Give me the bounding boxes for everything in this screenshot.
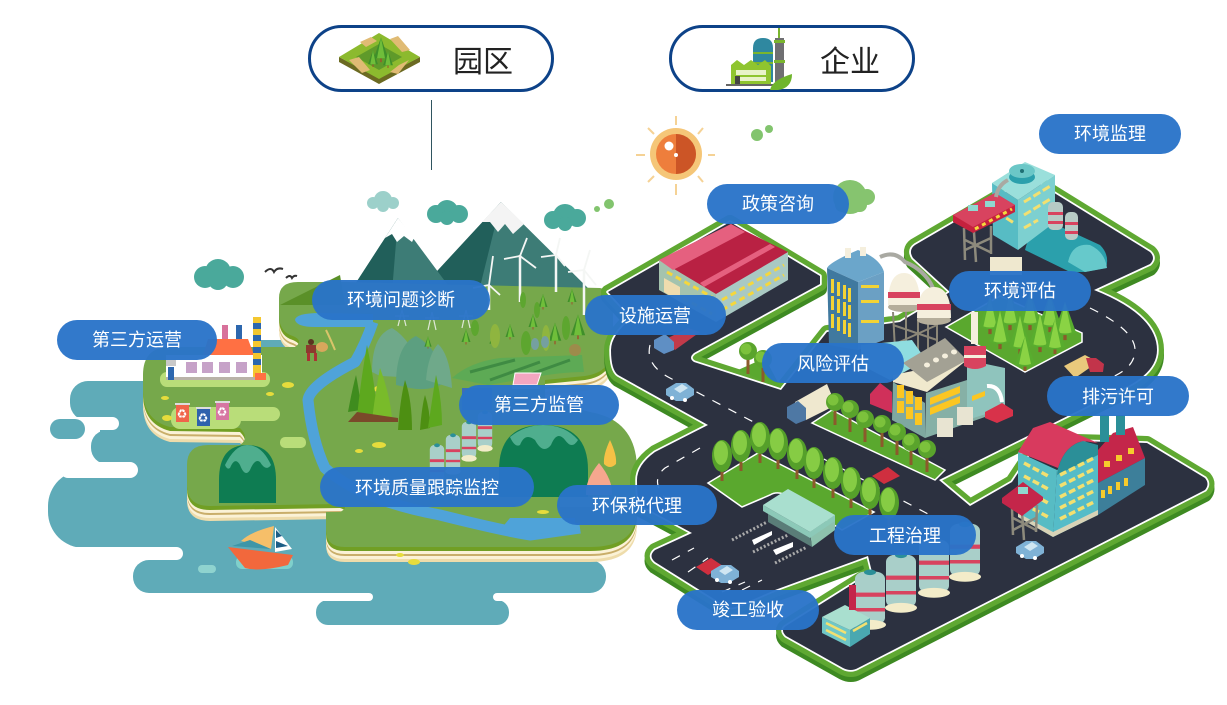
small teal plant: [822, 585, 870, 647]
icon: green factory: [726, 28, 792, 90]
solar panels: [462, 373, 541, 410]
pill: 环保税代理: [557, 485, 717, 525]
truck on road: [654, 328, 700, 354]
header pill: 企业: [670, 26, 914, 90]
pill: 第三方运营: [57, 320, 217, 360]
central factory: [861, 312, 1013, 438]
delivery truck: [787, 384, 832, 424]
small dark hill: [280, 275, 345, 305]
pill: 环境问题诊断: 环境问题诊断: [347, 290, 455, 310]
pill: 环境质量跟踪监控: [320, 467, 534, 507]
pill: 环境质量跟踪监控: 环境质量跟踪监控: [355, 478, 499, 498]
pill: 环境问题诊断: [312, 280, 490, 320]
coloured trees: [586, 440, 616, 495]
pill: 排污许可: [1047, 376, 1189, 416]
label: 园区: 园区: [453, 46, 513, 79]
pickup truck: [1064, 355, 1104, 378]
pill: 环境监理: 环境监理: [1074, 124, 1146, 144]
pylons: [395, 310, 473, 330]
tiny flowers: [161, 382, 549, 565]
sailboat: [228, 526, 293, 569]
water tanks: [429, 410, 493, 485]
pill: 竣工验收: 竣工验收: [712, 600, 784, 620]
farmer: [306, 330, 335, 361]
label: 企业: 企业: [820, 46, 880, 79]
cars: [666, 383, 1044, 584]
forest hills: [372, 328, 452, 389]
conifers and shrubs: [424, 289, 585, 356]
birds: [265, 268, 302, 310]
lower right building: [1002, 415, 1145, 540]
pill: 风险评估: [762, 343, 904, 383]
top right complex: [953, 162, 1107, 275]
header pill: 园区: [310, 26, 552, 90]
wind turbines: [473, 238, 596, 315]
recycling bins: ♻: [198, 413, 208, 423]
pill: 风险评估: 风险评估: [797, 354, 869, 374]
recycling bins: ♻: [177, 409, 187, 419]
green hills: [219, 425, 588, 503]
connector line: [431, 100, 432, 170]
pill: 设施运营: 设施运营: [619, 306, 691, 326]
pill: 设施运营: [585, 295, 726, 335]
tree rows: [712, 393, 936, 528]
sea: [48, 340, 618, 625]
pill: 环境评估: 环境评估: [984, 281, 1056, 301]
pill: 政策咨询: 政策咨询: [742, 194, 814, 214]
pill: 政策咨询: [707, 184, 849, 224]
pill: 竣工验收: [677, 590, 819, 630]
pill: 第三方监管: 第三方监管: [494, 395, 584, 415]
recycling bins: ♻: [217, 407, 227, 417]
warehouse: [659, 224, 788, 322]
tall blue building: [827, 247, 884, 350]
island: [143, 238, 637, 569]
river: [308, 322, 580, 535]
light grass pads: [160, 372, 270, 387]
tree parcels: [708, 292, 1082, 530]
pill: 工程治理: 工程治理: [869, 526, 941, 546]
house: [166, 317, 266, 380]
icon: park plot: [339, 33, 420, 84]
pill: 工程治理: [834, 515, 976, 555]
pill: 排污许可: 排污许可: [1082, 387, 1154, 407]
mountains: [350, 202, 595, 295]
pill: 环保税代理: 环保税代理: [592, 496, 682, 516]
road network: [608, 178, 1208, 675]
storage tanks lower: [854, 522, 981, 630]
clouds: [194, 125, 875, 290]
sun: [636, 116, 715, 195]
lane dashes: [649, 308, 1135, 592]
tall cypress trees: [348, 345, 442, 430]
pill: 第三方运营: 第三方运营: [92, 330, 182, 350]
pill: 环境评估: [949, 271, 1091, 311]
field: [452, 355, 584, 385]
recycling bins: [175, 401, 230, 426]
pill: 环境监理: [1039, 114, 1181, 154]
pill: 第三方监管: [459, 385, 619, 425]
toll booth: [732, 489, 835, 563]
gas tanks with scaffold: [880, 254, 951, 350]
